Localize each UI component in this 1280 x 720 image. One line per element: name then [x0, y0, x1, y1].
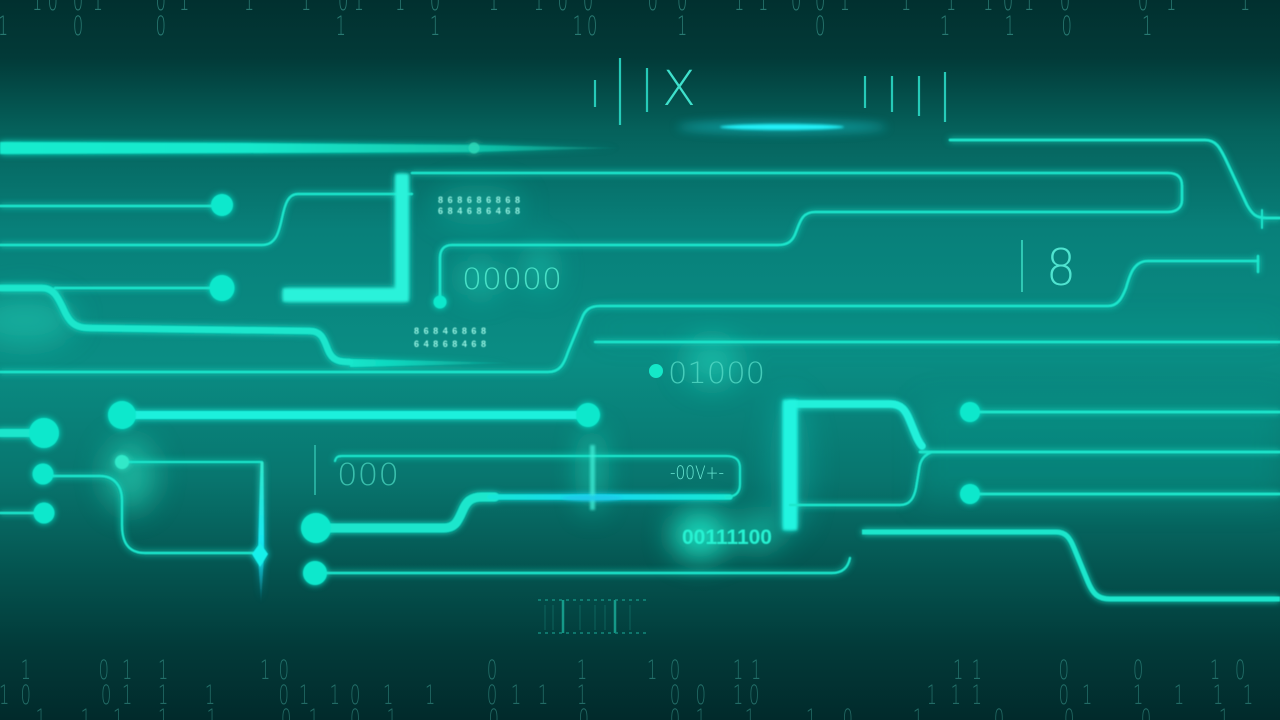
bottom tick pattern: [538, 600, 650, 633]
dumbbell nodes: [108, 401, 600, 429]
data readout: upper dots: 8 6 8 6 8 6 8 6 8: [438, 195, 520, 205]
binary rain: bottom: [0, 655, 1253, 720]
cyan light flare: [677, 121, 887, 133]
long mid trace: [0, 261, 1258, 372]
number readout 8: [1022, 239, 1076, 297]
small node: [115, 455, 129, 469]
data readout: lower dots: 8 6 8 4 6 8 6 8: [414, 326, 486, 336]
data readout: lower dots: 6 4 8 6 8 4 6 8: [414, 339, 486, 349]
central trace blue section: [490, 494, 730, 500]
fading stepped tail: [350, 359, 520, 367]
vertical flare: [562, 445, 622, 510]
rect top: [122, 461, 262, 463]
bracket heavy vertical: [783, 400, 797, 530]
thick top beam: [0, 142, 620, 154]
number readout 00000: 00000: [462, 262, 562, 296]
binary rain: top: [0, 0, 1250, 42]
left branching circuit: [43, 476, 258, 553]
lower right stepped trace: [862, 532, 1280, 599]
second node line: [55, 287, 222, 289]
number readout 000: [315, 445, 399, 495]
small readout in box: -00V+-: [670, 462, 724, 484]
right edge tick: [1261, 210, 1263, 228]
node: [960, 484, 980, 504]
node: [210, 275, 234, 301]
binary rain: top: 1001110101101: [0, 11, 1152, 42]
parallel mid line: [595, 341, 1280, 343]
circuit traces: [0, 140, 1280, 605]
beam node: [468, 142, 480, 154]
data readout: upper dots: 6 8 4 6 8 6 4 6 8: [438, 206, 520, 216]
central thick trace: [316, 497, 495, 528]
lower left stub: [0, 512, 44, 514]
data readout: upper dots: [438, 195, 520, 216]
number readout 000: 000: [337, 458, 399, 493]
central node: [301, 513, 331, 543]
upper left trace to corner: [0, 194, 412, 245]
top tick marks and X: [595, 58, 945, 125]
thick dumbbell: [122, 411, 588, 419]
left node: [32, 464, 54, 484]
diamond node: [252, 543, 268, 567]
data readout: lower dots: [414, 326, 486, 349]
thick elbow: [283, 174, 402, 295]
label: X: X: [662, 61, 696, 117]
cyan vertical: [258, 462, 264, 605]
right bottom node line: [970, 493, 1280, 495]
left stub node: [29, 418, 59, 448]
thick right bracket: [790, 404, 922, 446]
ambient glows: [0, 185, 1280, 559]
right top node line: [970, 411, 1280, 413]
binary rain: bottom: 10011101101101110010111011111: [0, 680, 1253, 711]
number readout 8: 8: [1046, 239, 1076, 297]
node: [960, 402, 980, 422]
binary rain: bottom: 101110011011110010: [21, 655, 1245, 686]
lower node: [303, 561, 327, 585]
node: [34, 502, 54, 524]
lower bracket branch: [790, 452, 932, 505]
node: [211, 194, 233, 216]
box trace: [335, 456, 740, 497]
loop end node: [434, 296, 446, 308]
lower trace: [315, 558, 850, 573]
left stub: [0, 429, 44, 437]
upper right trace: [950, 140, 1280, 218]
right mid line: [920, 451, 1280, 453]
number readout 01000: 01000: [668, 356, 765, 390]
thick stepped trace: [0, 288, 350, 362]
upper left node line: [0, 205, 222, 207]
glowing readout: 00111100: [682, 526, 772, 549]
right end tick: [1257, 256, 1259, 272]
long loop trace: [412, 173, 1182, 302]
